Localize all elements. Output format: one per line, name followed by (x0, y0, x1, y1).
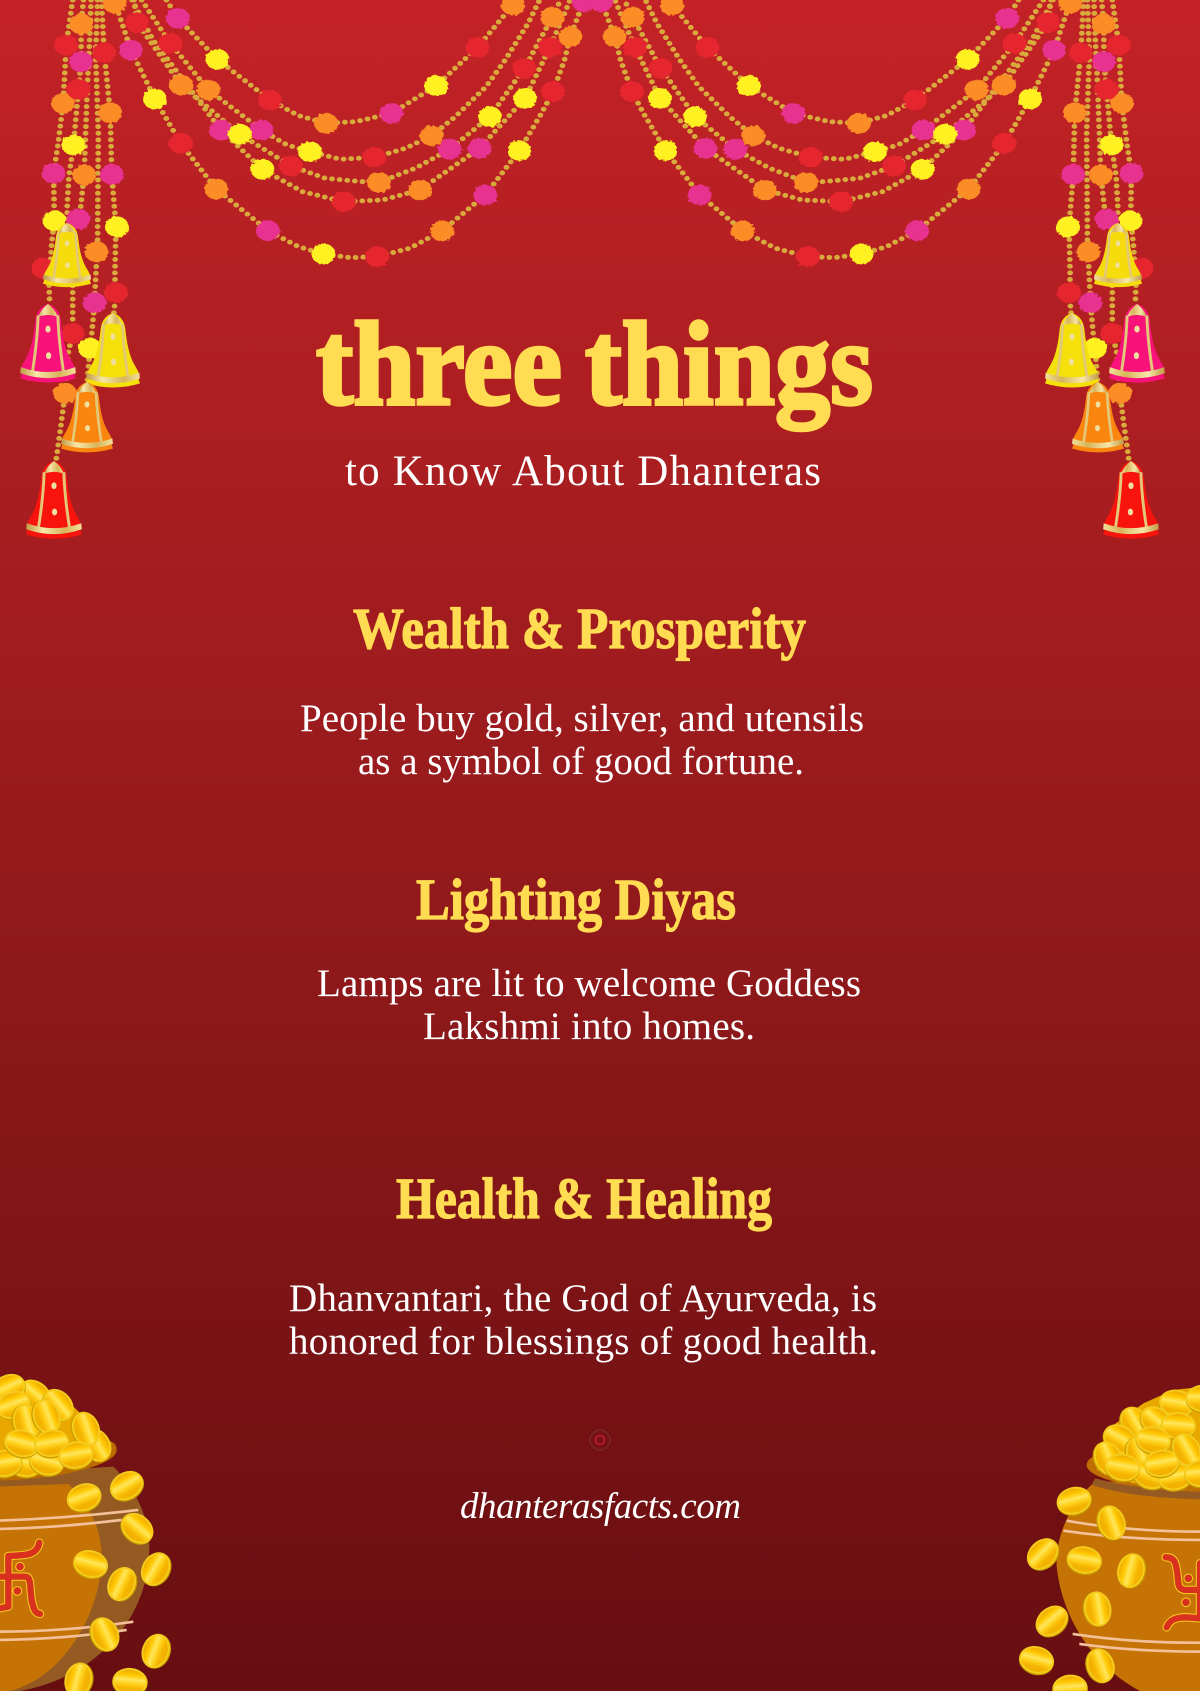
left marigold garland with hanging strands (43, 0, 584, 462)
section 2: lighting diyas (317, 867, 861, 1048)
body: wealth and prosperity: as a symbol of good fortune. (358, 740, 804, 783)
body: wealth and prosperity: People buy gold, silver, and utensils (300, 697, 864, 740)
heading: health and healing: Health & Healing (396, 1166, 772, 1231)
section 3: health and healing (289, 1166, 878, 1363)
icon: small target circle (590, 1430, 610, 1450)
body: lighting diyas: Lamps are lit to welcome Goddess (317, 962, 861, 1005)
body: health and healing (289, 1277, 878, 1363)
right marigold garland with hanging strands (601, 0, 1142, 462)
body: health and healing: honored for blessings of good health. (289, 1320, 878, 1363)
heading: wealth and prosperity: Wealth & Prosperity (353, 596, 806, 661)
heading: lighting diyas: Lighting Diyas (416, 867, 736, 932)
subtitle: to Know About Dhanteras (345, 448, 821, 495)
left gold pot with coins (0, 1368, 177, 1691)
right hanging bells (1045, 223, 1165, 539)
body: lighting diyas (317, 962, 861, 1048)
title (316, 297, 873, 431)
body: health and healing: Dhanvantari, the God of Ayurveda, is (289, 1277, 877, 1320)
body: wealth and prosperity (300, 697, 864, 783)
left hanging bells (20, 223, 140, 539)
website url: dhanterasfacts.com (460, 1486, 741, 1527)
body: lighting diyas: Lakshmi into homes. (423, 1005, 755, 1048)
title: three (316, 297, 562, 430)
right gold pot with coins (1016, 1385, 1200, 1691)
title: things (585, 297, 873, 431)
section 1: wealth and prosperity (300, 596, 864, 783)
